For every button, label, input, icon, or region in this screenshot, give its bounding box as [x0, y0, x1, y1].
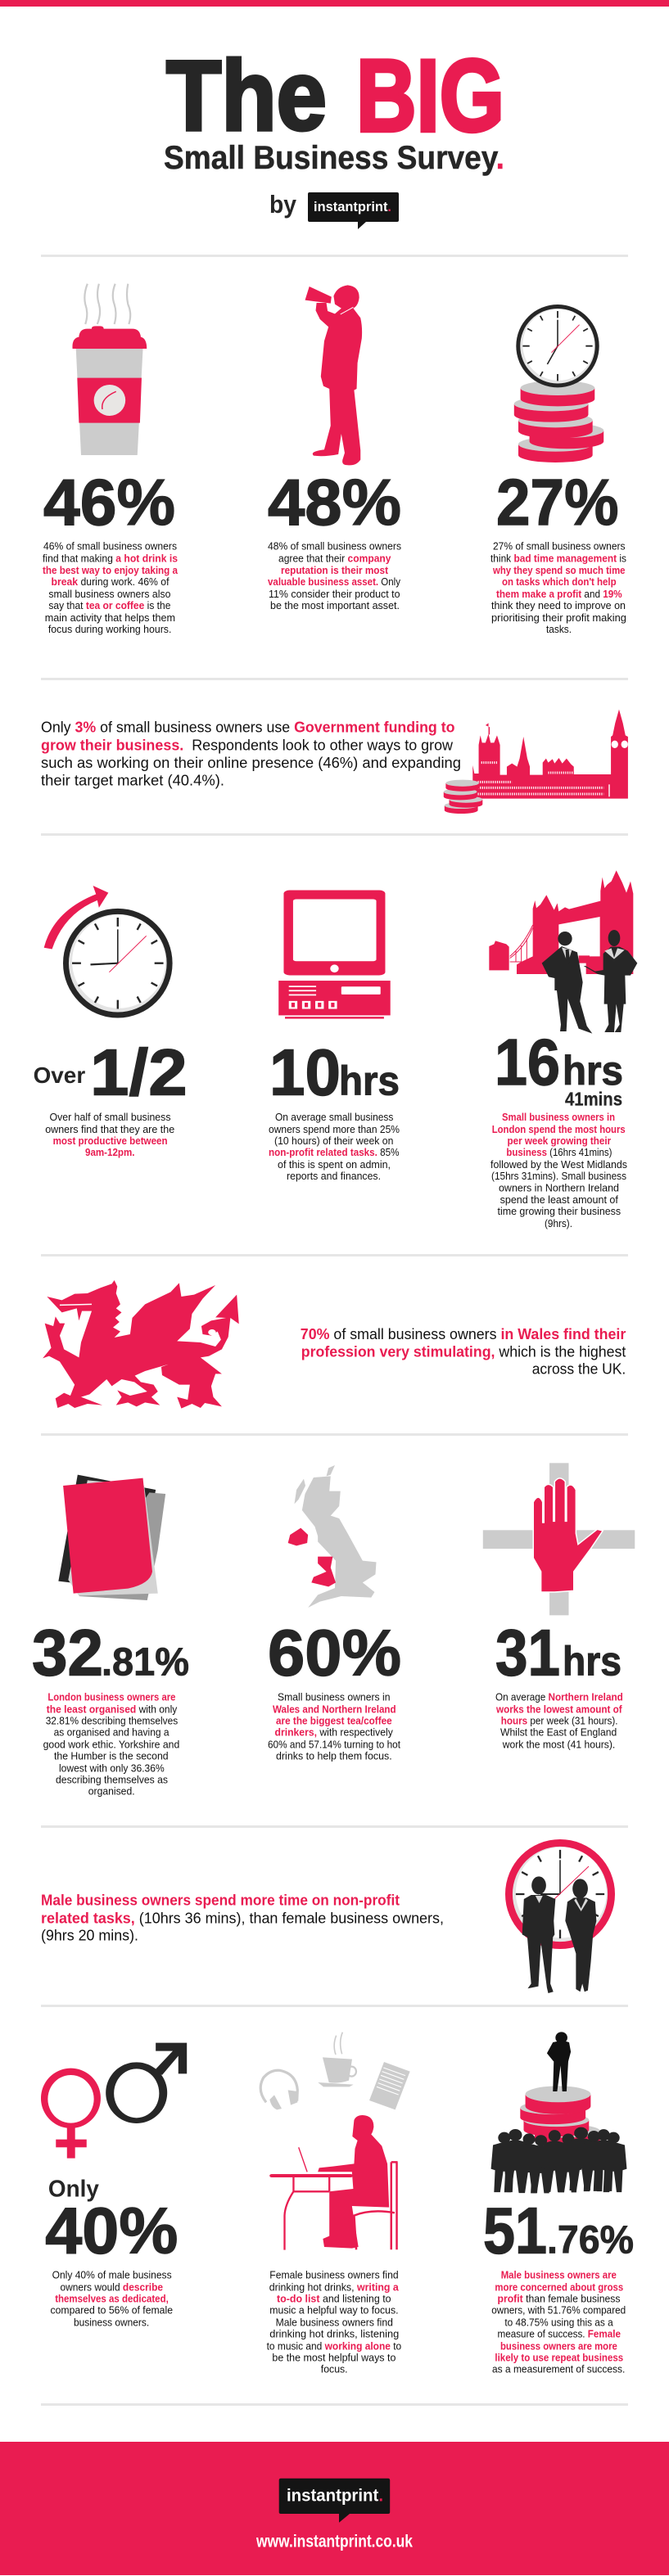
panel: helpful ways to focus — [260, 2032, 410, 2375]
stat: 16hrs 41mins: 41mins — [565, 1089, 622, 1110]
text block: of this is spent on admin, — [278, 1158, 391, 1171]
text block: business (16hrs 41mins) — [506, 1146, 612, 1158]
text block: owners spend more than 25% — [269, 1123, 400, 1135]
text block: drinkers, with respectively — [275, 1726, 393, 1739]
text block: Wales and Northern Ireland — [273, 1703, 396, 1716]
text block: per week growing their — [508, 1135, 611, 1147]
text block: Only 3% of small business owners use Government funding to — [41, 720, 455, 736]
stat: 16hrs 41mins — [495, 1026, 623, 1110]
stat: 31hrs: hrs — [563, 1639, 622, 1685]
panel: 31hrs Northern Ireland — [483, 1463, 635, 1751]
text block: lowest with only 36.36% — [59, 1762, 165, 1775]
text block: reputation is their most — [281, 564, 389, 576]
text block: say that tea or coffee is the — [48, 599, 170, 611]
text block: organised. — [88, 1785, 135, 1798]
icon: Welsh dragon — [43, 1280, 239, 1409]
text block — [495, 1691, 623, 1751]
text block: On average Northern Ireland — [495, 1691, 623, 1703]
by instantprint logo: instantprint. — [314, 199, 391, 214]
icon: Tower Bridge with business people — [489, 870, 637, 1034]
icon: stack of papers — [58, 1475, 165, 1600]
text block: 11% consider their product to — [269, 588, 400, 600]
panel: male vs female hours — [41, 1839, 615, 1993]
text block: (9hrs). — [545, 1217, 572, 1229]
icon: gender symbols — [41, 2043, 187, 2159]
text block: think they need to improve on — [491, 599, 626, 611]
stat: 31hrs: 31 — [495, 1617, 560, 1690]
text block: Male business owners spend more time on non-profit — [41, 1892, 400, 1908]
text block: On average small business — [275, 1111, 394, 1123]
stat: over 1/2: 1/2 — [90, 1036, 188, 1108]
text block: drinking hot drinks, writing a — [269, 2281, 400, 2294]
stat: 16hrs 41mins: hrs — [563, 1048, 623, 1094]
text block: find that making a hot drink is — [43, 553, 178, 565]
text block: compared to 56% of female — [51, 2304, 173, 2317]
panel: 10hrs non-profit tasks — [269, 891, 400, 1182]
text block: owners would describe — [61, 2281, 163, 2294]
text block: reports and finances. — [287, 1170, 381, 1182]
text block: Over half of small business — [49, 1111, 171, 1123]
text block: spend the least amount of — [500, 1193, 618, 1206]
stat: 60%: 60% — [268, 1617, 401, 1690]
text block: small business owners also — [48, 588, 170, 600]
text block — [45, 1111, 174, 1158]
text block: (10 hours) of their week on — [274, 1135, 393, 1147]
title — [164, 39, 504, 176]
stat: 32.81%: .81% — [102, 1641, 189, 1685]
title: The — [166, 40, 327, 151]
text block — [51, 2269, 173, 2329]
icon: computer — [278, 891, 391, 1019]
text block: grow their business. Respondents look to other ways to grow — [41, 737, 454, 753]
icon: clock with arrow — [44, 886, 173, 1017]
stat: 10hrs — [269, 1036, 400, 1108]
stat: 48%: 48% — [268, 466, 401, 539]
text block — [268, 540, 401, 611]
text block: owners, with 51.76% compared — [491, 2304, 626, 2317]
stat: 16hrs 41mins: 16 — [495, 1026, 560, 1099]
text block: 60% and 57.14% turning to hot — [268, 1739, 400, 1751]
panel: over 1/2 productive — [34, 886, 188, 1158]
text block: works the lowest amount of — [495, 1703, 622, 1716]
text block: Only 40% of male business — [52, 2269, 172, 2281]
text block: 70% of small business owners in Wales find their — [301, 1326, 626, 1342]
stat: over 1/2 — [34, 1036, 188, 1108]
text block: such as working on their online presence (46%) and expanding — [41, 755, 461, 771]
stat: over 1/2: Over — [34, 1062, 85, 1088]
by instantprint logo — [269, 190, 399, 229]
text block: as a measurement of success. — [492, 2363, 625, 2375]
text block — [43, 540, 179, 635]
text block: as organised and having a — [54, 1726, 170, 1739]
text block: agree that their company — [278, 553, 391, 565]
text block: 32.81% describing themselves — [46, 1715, 179, 1727]
icon: clock with two business people — [505, 1839, 615, 1993]
text block: 27% of small business owners — [493, 540, 626, 553]
panel: 51.76% gross profit — [483, 2032, 634, 2375]
footer logo: instantprint. — [287, 2487, 383, 2506]
text block: (9hrs 20 mins). — [41, 1928, 138, 1944]
text block: time growing their business — [498, 1205, 622, 1217]
panel: government funding — [41, 710, 628, 814]
text block — [267, 2269, 401, 2375]
panel: time management 27% — [490, 305, 626, 635]
text block: hours per week (31 hours). — [501, 1715, 618, 1727]
stat: only 40%: Only — [48, 2176, 99, 2202]
text block — [41, 720, 461, 788]
text block: related tasks, (10hrs 36 mins), than female business owners, — [41, 1910, 444, 1926]
text block: the least organised with only — [47, 1703, 178, 1716]
icon: man with megaphone — [305, 285, 362, 465]
text block — [41, 1892, 444, 1944]
footer logo — [279, 2479, 390, 2523]
text block: prioritising their profit making — [491, 611, 626, 624]
text block: to 48.75% using this as a — [504, 2317, 613, 2329]
text block: owners in Northern Ireland — [499, 1182, 619, 1194]
text block: followed by the West Midlands — [490, 1158, 627, 1171]
text block: the best way to enjoy taking a — [43, 564, 179, 576]
text block: Male business owners find — [276, 2317, 393, 2329]
stat: 10hrs: 10 — [269, 1036, 341, 1108]
stat: 27%: 27% — [496, 466, 619, 539]
text block: be the most helpful ways to — [272, 2352, 396, 2364]
text block — [43, 1691, 179, 1798]
text block: (15hrs 31mins). Small business — [491, 1170, 626, 1182]
text block: London spend the most hours — [492, 1123, 626, 1135]
footer — [0, 2442, 669, 2575]
text block: describing themselves as — [56, 1774, 168, 1786]
panel: 60% tea and coffee — [268, 1465, 401, 1762]
panel: Wales — [43, 1280, 626, 1409]
stat: 31hrs — [495, 1617, 622, 1690]
text block — [301, 1326, 626, 1377]
text block: on tasks which don't help — [502, 575, 617, 588]
icon: UK map — [288, 1465, 377, 1608]
by instantprint logo: by — [269, 190, 297, 219]
title: Small Business Survey. — [164, 140, 504, 176]
stat: 32.81%: 32 — [32, 1617, 103, 1690]
text block: work the most (41 hours). — [502, 1739, 615, 1751]
stat: only 40%: 40% — [45, 2195, 178, 2267]
stat: 32.81% — [32, 1617, 189, 1690]
text block: think bad time management is — [490, 553, 626, 565]
icon: red hand on cross — [483, 1463, 635, 1615]
text block — [269, 1111, 400, 1182]
text block — [490, 540, 626, 635]
text block: main activity that helps them — [45, 611, 175, 624]
text block: drinking hot drinks, listening — [269, 2328, 399, 2340]
text block: focus. — [321, 2363, 348, 2375]
text block: to music and working alone to — [267, 2340, 401, 2353]
text block: likely to use repeat business — [495, 2352, 623, 2364]
panel: 32.81% organised — [32, 1475, 189, 1798]
text block: business owners. — [74, 2317, 149, 2329]
text block: 48% of small business owners — [268, 540, 401, 553]
text block: 9am-12pm. — [85, 1146, 134, 1158]
text block: more concerned about gross — [495, 2281, 623, 2294]
icon: headphones, cup and list — [260, 2032, 410, 2109]
icon: coin stack — [444, 780, 482, 814]
panel: company reputation 48% — [268, 285, 401, 611]
text block: business owners are more — [500, 2340, 617, 2353]
text block: music a helpful way to focus. — [269, 2304, 399, 2317]
text block: London business owners are — [47, 1691, 175, 1703]
icon: man on coins above crowd — [491, 2032, 626, 2193]
text block: measure of success. Female — [498, 2328, 621, 2340]
text block: tasks. — [546, 623, 572, 635]
text block: 46% of small business owners — [43, 540, 177, 553]
text block — [268, 1691, 400, 1762]
panel: hot drink 46% — [43, 284, 179, 635]
text block — [491, 2269, 626, 2375]
text block: are the biggest tea/coffee — [276, 1715, 392, 1727]
stat: 46%: 46% — [43, 466, 175, 539]
title: BIG — [356, 39, 504, 153]
text block: break during work. 46% of — [51, 575, 170, 588]
text block: Small business owners in — [502, 1111, 615, 1123]
text block: why they spend so much time — [492, 564, 626, 576]
text block: to-do list and listening to — [277, 2293, 391, 2305]
icon: clock on coins — [514, 305, 603, 462]
text block: good work ethic. Yorkshire and — [43, 1739, 179, 1751]
text block: Small business owners in — [278, 1691, 390, 1703]
stat: 51.76%: .76% — [547, 2219, 634, 2262]
icon: person working at laptop — [269, 2115, 398, 2250]
text block: profession very stimulating, which is the highest — [301, 1343, 626, 1360]
text block: them make a profit and 19% — [496, 588, 622, 600]
panel: only 40% dedicated — [41, 2043, 187, 2329]
text block — [490, 1111, 627, 1229]
top bar — [0, 0, 669, 7]
text block: non-profit related tasks. 85% — [269, 1146, 400, 1158]
stat: 51.76%: 51 — [483, 2195, 547, 2267]
text block: profit than female business — [498, 2293, 621, 2305]
icon: Houses of Parliament — [472, 710, 628, 799]
text block: the Humber is the second — [54, 1750, 169, 1762]
stat: 51.76% — [483, 2195, 634, 2267]
text block: owners find that they are the — [45, 1123, 174, 1135]
panel: 16hrs London — [489, 870, 637, 1229]
text block: most productive between — [53, 1135, 168, 1147]
text block: across the UK. — [532, 1360, 626, 1377]
text block: Whilst the East of England — [500, 1726, 617, 1739]
stat: 10hrs: hrs — [339, 1058, 400, 1103]
icon: coffee cup — [72, 284, 147, 455]
text block: Female business owners find — [269, 2269, 399, 2281]
text block: their target market (40.4%). — [41, 772, 224, 788]
text block: valuable business asset. Only — [268, 575, 400, 588]
text block: focus during working hours. — [48, 623, 171, 635]
text block: Male business owners are — [501, 2269, 617, 2281]
website address: www.instantprint.co.uk — [255, 2533, 413, 2551]
text block: be the most important asset. — [270, 599, 400, 611]
text block: drinks to help them focus. — [276, 1750, 392, 1762]
text block: themselves as dedicated, — [55, 2293, 169, 2305]
